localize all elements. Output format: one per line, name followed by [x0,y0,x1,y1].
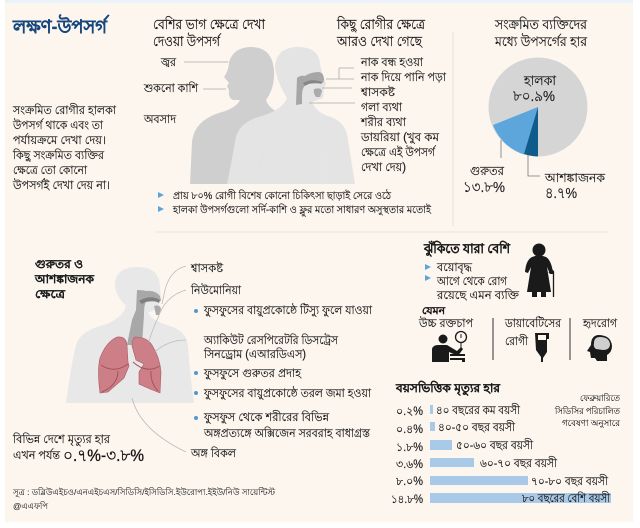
labels: other symptoms: নাক বন্ধ হওয়া [360,57,424,69]
illustration: body with lungs [66,267,194,403]
heading: other symptoms: আরও দেখা গেছে [336,33,423,49]
text block: intro: ক্ষেত্রে তো কোনো [13,165,88,177]
labels: severe conditions: অঙ্গপ্রত্যঙ্গে অক্সিজেন সরবরাহ বাধাগ্রস্ত [203,426,371,440]
example: diabetes: ডায়াবেটিসের [504,316,562,330]
bar: under 40: ০.২% [396,406,423,418]
icon: nose and throat [296,72,324,105]
bar: 50-60 [396,438,534,454]
icon: head with brain [587,335,612,361]
bar: 60-70: ৬০-৭০ বছর বয়সী [480,456,558,470]
labels: other symptoms: ডায়রিয়া (খুব কম [360,130,440,145]
example: diabetes [504,316,562,362]
note: research: সিডিসির পরিচালিত [554,406,620,416]
pie chart: গুরুতর [470,164,505,178]
callout: death rate: এখন পর্যন্ত [13,448,61,462]
labels: severe conditions: সিনড্রোম (এআরডিএস) [203,347,306,361]
labels: severe conditions: অ্যাকিউট রেসপিরেটরি ডিসট্রেস [203,333,339,347]
labels: severe conditions [190,261,373,460]
bar: 50-60: ৫০-৬০ বছর বয়সী [456,438,534,452]
bullets: mild cases: হালকা উপসর্গগুলো সর্দি-কাশি ও ফ্লুর মতো সাধারণ অসুস্থতার মতোই [172,203,432,217]
source: @এএফপি [13,501,49,511]
note: research [554,393,621,429]
example: heart disease: হৃদরোগ [582,318,618,330]
heading: pie chart: মধ্যে উপসর্গের হার [494,33,588,49]
icon: airway [127,290,161,345]
bullets: at risk: আগে থেকে রোগ [436,276,508,288]
text block: intro [12,103,117,192]
bar: over 80: ১৪.৮% [391,494,423,506]
callout: death rate: বিভিন্ন দেশে মৃত্যুর হার [12,432,111,447]
bullets: mild cases: প্রায় ৮০% রোগী বিশেষ কোনো চিকিৎসা ছাড়াই সেরে ওঠে [173,189,392,202]
heading: severe cases: ক্ষেত্রে [35,289,67,301]
labels: other symptoms: গলা ব্যথা [361,102,403,114]
bar: 70-80 [396,474,609,488]
example: diabetes: রোগী [505,334,529,348]
note: research: ফেব্রুয়ারিতে [580,393,620,403]
labels: other symptoms: শ্বাসকষ্ট [360,85,396,99]
heading: examples: যেমন [422,305,446,317]
bar: 70-80: ৮.০% [396,476,423,488]
pie chart: ১৩.৮% [463,179,505,196]
bullets: at risk: রয়েছে এমন ব্যক্তি [436,288,520,302]
bar: 60-70: ৩.৬% [396,459,423,471]
bar: 50-60: ১.৮% [396,442,423,454]
icon: elderly woman with cane [525,244,554,297]
bar: 40-50 [396,420,516,436]
bar: 70-80: ৭০-৮০ বছর বয়সী [531,474,609,488]
heading: at risk: ঝুঁকিতে যারা বেশি [423,240,511,258]
labels: other symptoms: ক্ষেত্রে এই উপসর্গ [361,145,437,159]
illustration: two human silhouettes [190,47,355,184]
text block: intro: উপসর্গই দেখা দেয় না। [12,178,110,192]
labels: other symptoms [309,57,447,174]
pie chart: আশঙ্কাজনক [544,171,606,185]
connector lines: severe conditions [132,266,186,452]
labels: other symptoms: দেখা দেয়) [361,162,406,174]
pie chart [463,58,606,202]
labels: common symptoms [143,57,228,126]
heading: common symptoms [153,16,266,49]
labels: severe conditions: অঙ্গ বিকল [190,446,237,460]
text block: intro: সংক্রমিত রোগীর হালকা [12,103,117,117]
text block: intro: পর্যায়ক্রমে দেখা দেয়। [13,133,106,147]
note: research: গবেষণা অনুসারে [562,418,621,429]
pie chart: ৪.৭% [545,185,577,202]
heading: severe cases [34,259,95,301]
icon: person with blood pressure gauge [432,332,466,362]
source: সূত্র : ডব্লিউএইচও/এনএইচএস/সিডিসি/ইসিডিসি.ইউরোপা.ইইউ/নিউ সায়েন্টিস্ট [12,486,276,498]
bullets: mild cases [158,189,432,217]
labels: other symptoms: নাক দিয়ে পানি পড়া [360,70,447,84]
heading: other symptoms [336,16,426,49]
bar chart: age mortality [391,403,611,506]
bar: over 80 [391,491,611,506]
heading: other symptoms: কিছু রোগীর ক্ষেত্রে [336,16,426,33]
labels: common symptoms: শুকনো কাশি [143,81,199,95]
text block: intro: উপসর্গ থাকে এবং তা [12,118,104,132]
text block: intro: কিছু সংক্রমিত ব্যক্তির [12,148,105,163]
icon: left lung [98,337,129,393]
icon: right lung [132,337,161,393]
bullets: at risk: বয়োবৃদ্ধ [436,262,473,275]
heading: pie chart [494,16,588,49]
example: heart disease [582,318,618,361]
title: লক্ষণ-উপসর্গ [12,14,110,38]
heading: common symptoms: দেওয়া উপসর্গ [153,33,222,49]
callout: death rate: ০.৭%-৩.৮% [63,446,144,465]
source [12,486,276,511]
heading: common symptoms: বেশির ভাগ ক্ষেত্রে দেখা [153,16,266,32]
heading: age mortality: বয়সভিত্তিক মৃত্যুর হার [395,380,500,397]
bar: over 80: ৮০ বছরের বেশি বয়সী [522,491,611,505]
heading: pie chart: সংক্রমিত ব্যক্তিদের [494,16,588,32]
pie chart: হালকা [523,73,556,88]
labels: common symptoms: জ্বর [160,57,177,69]
example: high blood pressure [418,316,474,362]
labels: common symptoms: অবসাদ [143,114,177,126]
labels: severe conditions: ফুসফুসের বায়ুপ্রকোষ্ঠে টিস্যু ফুলে যাওয়া [203,303,373,318]
labels: other symptoms: শরীর ব্যথা [360,115,407,129]
bar: under 40 [396,403,521,418]
labels: severe conditions: ফুসফুসের বায়ুপ্রকোষ্ঠে তরল জমা হওয়া [203,386,372,401]
bar: 40-50: ৪০-৫০ বছর বয়সী [438,420,516,434]
pie chart: ৮০.৯% [513,88,555,105]
example: high blood pressure: উচ্চ রক্তচাপ [418,316,474,330]
bullets: at risk [425,262,520,302]
heading: severe cases: গুরুতর ও [35,259,84,271]
labels: severe conditions: ফুসফুস থেকে শরীরের বিভিন্ন [203,410,329,425]
heading: severe cases: আশঙ্কাজনক [34,274,95,286]
bar: 60-70 [396,456,558,471]
labels: severe conditions: ফুসফুসে গুরুতর প্রদাহ [203,368,302,381]
bar: under 40: ৪০ বছরের কম বয়সী [436,403,521,417]
callout: death rate [12,432,144,465]
labels: severe conditions: শ্বাসকষ্ট [190,261,224,275]
icon: insulin test device [535,333,549,362]
bar: 40-50: ০.৪% [396,424,423,436]
labels: severe conditions: নিউমোনিয়া [190,283,242,297]
